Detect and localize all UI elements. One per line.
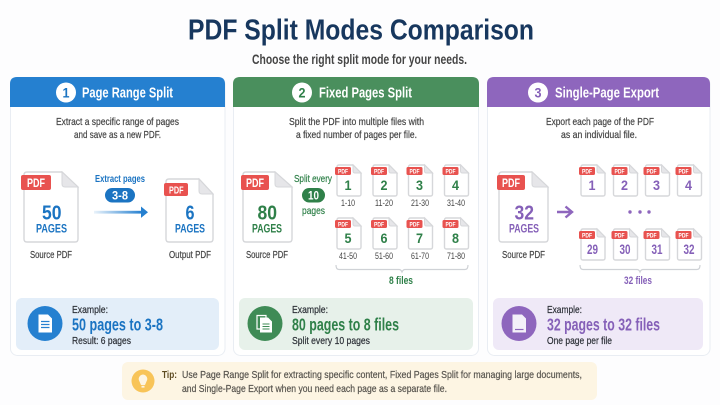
example box: page range [16,298,219,350]
description [289,116,424,141]
header: single-page export [487,77,710,107]
output files grid: 8 files [389,275,413,287]
example box: page range: 50 pages to 3-8 [72,314,163,334]
output files grid: PDF [678,168,689,175]
output files grid: 1 [588,177,596,193]
output files grid: 41-50 [339,251,357,261]
source pdf document: Source PDF [30,249,72,261]
output files grid: PDF [410,168,420,175]
output files grid: 4 [685,177,692,193]
output files grid: 21-30 [411,198,429,208]
output files grid: PDF [614,232,625,239]
source pdf document [497,172,548,261]
source pdf document: PAGES [252,222,282,236]
output files grid: 61-70 [411,251,429,261]
split every 10 pages label: pages [302,205,325,217]
source pdf document: 80 [258,202,277,224]
output files grid: 3 [653,177,660,193]
title: PDF Split Modes Comparison [188,14,534,46]
output files grid: PDF [338,221,348,228]
output files grid: 31-40 [447,198,465,208]
source pdf document: PDF [502,178,520,190]
header: fixed pages split: 2 [298,86,306,100]
output files grid: 7 [416,230,423,246]
extract pages arrow: 3-8 [112,190,129,202]
example box: fixed pages: 80 pages to 8 files [292,314,399,334]
output pdf document [164,179,213,261]
icon: light bulb [132,370,154,392]
output files grid: PDF [446,221,456,228]
source pdf document [21,172,78,261]
arrow [557,206,572,218]
description [546,116,654,141]
source pdf document: 50 [42,202,62,224]
example box: fixed pages [239,298,473,350]
source pdf document: 32 [514,202,534,224]
header: fixed pages split [233,77,479,107]
example box: fixed pages: Example: [292,304,328,316]
output files grid: PDF [338,168,348,175]
output files grid: 32 files [624,275,652,287]
source pdf document: PAGES [509,222,539,236]
output files grid: PDF [678,232,689,239]
output files grid: 32 [684,241,695,257]
panel: page range split [10,77,225,356]
output pdf document: PDF [169,186,184,196]
output files grid [335,165,468,287]
output files grid: 5 [344,230,352,246]
output files grid: PDF [646,232,657,239]
source pdf document: Source PDF [246,249,288,261]
tip callout: Tip: [162,369,177,381]
output files grid: 11-20 [375,198,393,208]
output files grid: 1-10 [341,198,355,208]
output files grid: 6 [380,230,388,246]
example box: page range: Example: [72,304,108,316]
header: page range split: Page Range Split [82,84,173,102]
output files grid: 2 [621,177,628,193]
header: single-page export: Single-Page Export [555,84,659,102]
description: Split the PDF into multiple files with [289,116,424,128]
output files grid: 29 [587,241,598,257]
source pdf document [241,172,292,261]
output files grid: PDF [374,221,384,228]
panel: single-page export [487,77,710,356]
source pdf document: PDF [246,178,264,190]
split every 10 pages label: Split every [294,173,333,185]
output files grid: 31 [652,241,663,257]
output files grid: PDF [410,221,420,228]
example box: single-page: Example: [547,304,582,316]
tip callout: Use Page Range Split for extracting specific content, Fixed Pages Split for managing large documents, [182,369,582,381]
output files grid: PDF [646,168,657,175]
tip callout [122,362,597,400]
output files grid: PDF [614,168,625,175]
output files grid: PDF [582,232,592,239]
output files grid: 51-60 [375,251,393,261]
description: Export each page of the PDF [546,116,654,128]
description: as an individual file. [561,129,637,141]
split every 10 pages label [294,173,333,217]
example box: fixed pages: Split every 10 pages [292,335,370,347]
source pdf document: PAGES [36,222,67,236]
output files grid: 2 [380,177,388,193]
example box: single-page: 32 pages to 32 files [547,314,660,334]
example box: single-page [493,298,703,350]
description [56,116,179,141]
description: a fixed number of pages per file. [296,129,417,141]
header: page range split: 1 [62,86,70,100]
output files grid: 3 [416,177,423,193]
output files grid: 1 [344,177,352,193]
subtitle: Choose the right split mode for your needs. [252,52,467,67]
output files grid: 8 [452,230,459,246]
output files grid: PDF [374,168,384,175]
output files grid [579,165,702,287]
output pdf document: 6 [186,202,194,224]
description: Extract a specific range of pages [56,116,179,128]
output files grid: PDF [446,168,456,175]
source pdf document: PDF [27,178,45,190]
tip callout: and Single-Page Export when you need each page as a separate file. [182,383,447,395]
example box: single-page: One page per file [547,335,612,347]
output files grid: 30 [620,241,631,257]
extract pages arrow [94,173,148,218]
header: fixed pages split: Fixed Pages Split [319,84,412,102]
output pdf document: Output PDF [169,249,211,261]
header: single-page export: 3 [534,86,542,100]
description: and save as a new PDF. [74,129,161,141]
source pdf document: Source PDF [502,249,545,261]
header: page range split [10,77,225,107]
output files grid: PDF [582,168,592,175]
split every 10 pages label: 10 [308,190,319,202]
output files grid: 4 [452,177,459,193]
output files grid: 71-80 [447,251,465,261]
extract pages arrow: Extract pages [95,173,145,185]
panel: fixed pages split [233,77,479,356]
output pdf document: PAGES [175,222,205,236]
example box: page range: Result: 6 pages [72,335,131,347]
